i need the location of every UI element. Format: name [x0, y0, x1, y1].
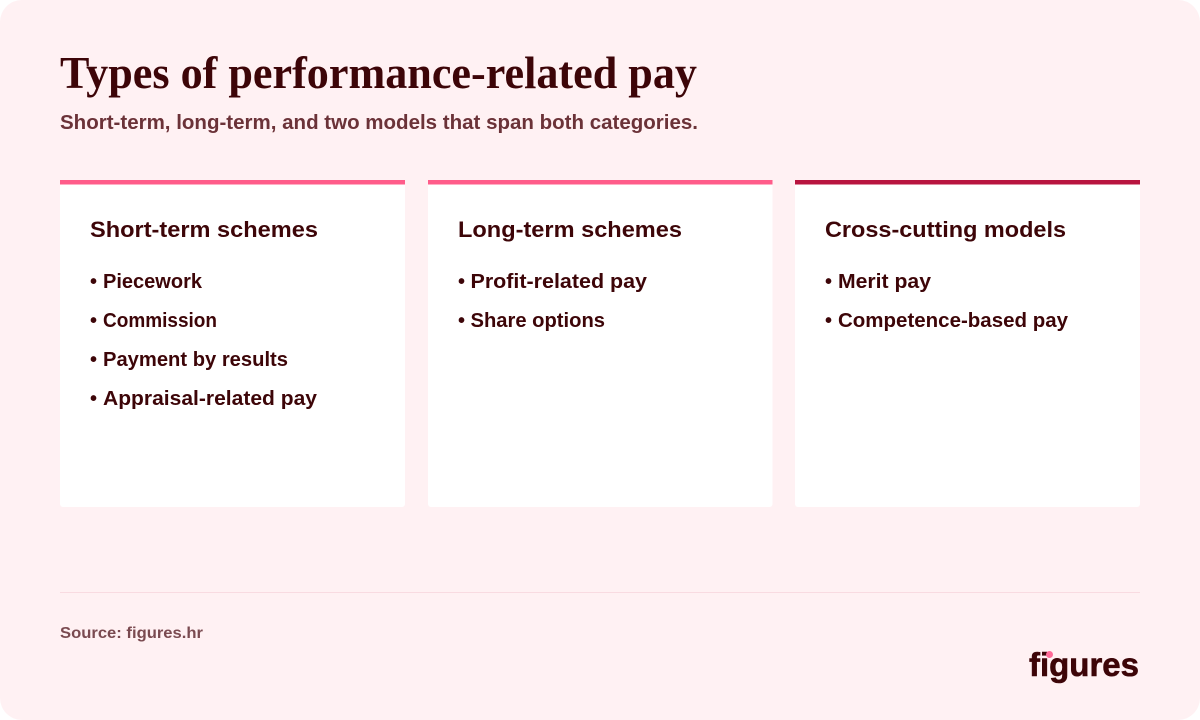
accent bar — [428, 180, 772, 184]
list item: Commission — [103, 310, 217, 332]
panel: cross-cutting models — [795, 180, 1140, 507]
logo dot — [1046, 651, 1053, 658]
list item: Piecework — [103, 271, 203, 293]
accent bar — [60, 180, 405, 184]
panel: long-term schemes — [428, 180, 772, 507]
list item: Merit pay — [838, 271, 932, 293]
list item: • — [458, 271, 465, 293]
subtitle: Short-term, long-term, and two models that span both categories. — [60, 112, 698, 134]
list item: • — [90, 388, 97, 410]
heading: Cross-cutting models — [825, 217, 1066, 242]
list item: • — [825, 271, 832, 293]
card background — [60, 180, 405, 507]
heading: Short-term schemes — [90, 217, 318, 242]
source note: Source: figures.hr — [60, 625, 203, 642]
logo: figures — [1029, 646, 1139, 683]
list item: • — [90, 349, 97, 371]
accent bar — [795, 180, 1140, 184]
list item: Share options — [470, 310, 605, 332]
card background — [428, 180, 772, 507]
panel: short-term schemes — [60, 180, 405, 507]
list item: • — [90, 271, 97, 293]
list item: Competence-based pay — [838, 310, 1069, 332]
list item: Appraisal-related pay — [103, 388, 318, 410]
title: Types of performance-related pay — [60, 47, 697, 98]
card background — [795, 180, 1140, 507]
list item: Payment by results — [103, 349, 288, 371]
list item: Profit-related pay — [470, 271, 648, 293]
heading: Long-term schemes — [458, 217, 682, 242]
list item: • — [825, 310, 832, 332]
list item: • — [90, 310, 97, 332]
list item: • — [458, 310, 465, 332]
logo wordmark: figures — [1029, 646, 1139, 683]
